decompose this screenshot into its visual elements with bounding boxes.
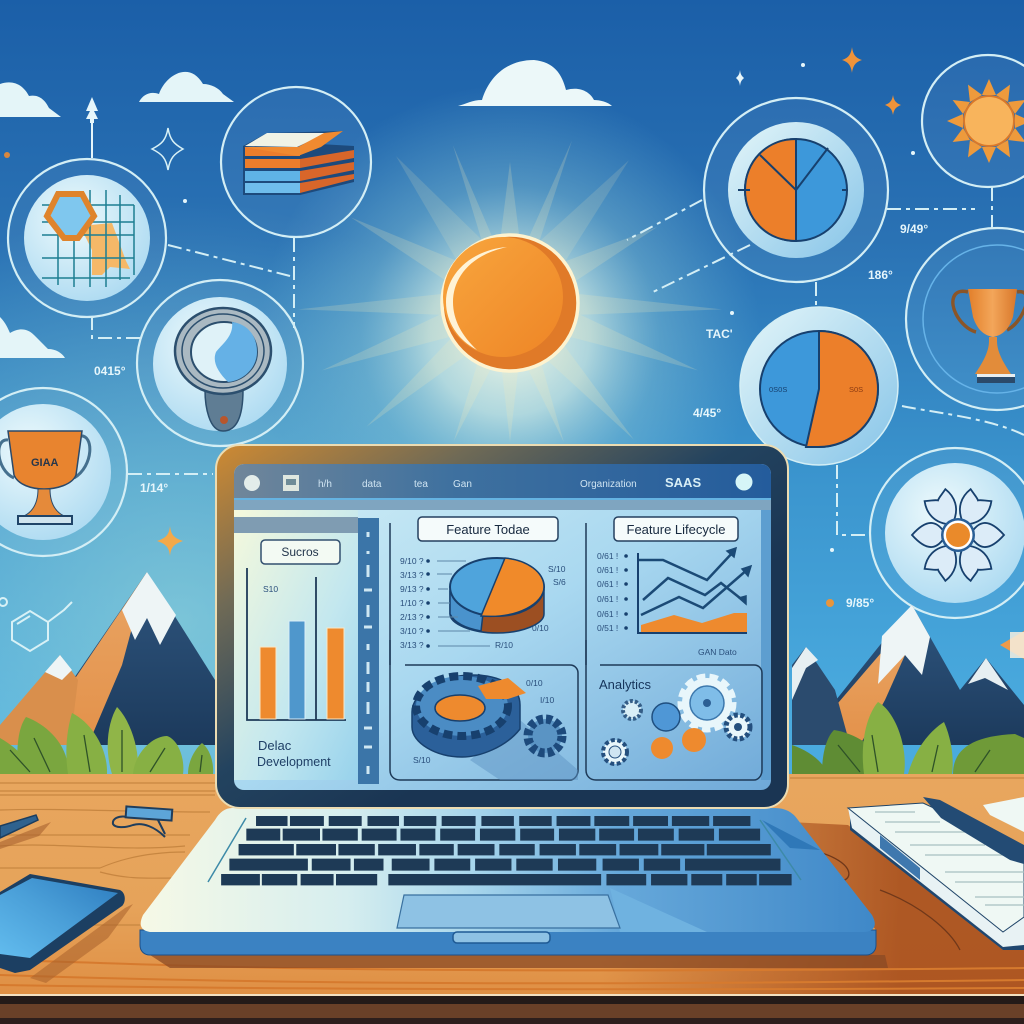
icon circle: magnifier lens [137, 280, 303, 446]
icon circle: pie chart lower: 0S0S [769, 385, 787, 394]
keyboard [221, 821, 792, 880]
header bar: Organization [580, 479, 637, 490]
lower gear panel [390, 640, 578, 780]
sun rays [298, 138, 722, 448]
header bar: tea [414, 479, 428, 490]
feature lifecycle line chart [586, 517, 751, 665]
pie chart [450, 558, 544, 633]
foliage [0, 702, 1024, 774]
laptop shadow [150, 955, 888, 968]
icon circle: pie chart top [704, 98, 888, 282]
middle feature panel: 9/10 ? [400, 556, 424, 566]
sky background [0, 0, 1024, 800]
degree labels: 9/85° [846, 596, 874, 610]
feature lifecycle line chart: 0/61 ! [597, 609, 618, 619]
lower gear panel: S/10 [413, 755, 431, 765]
icon circle: pie chart lower: S0S [849, 385, 863, 394]
left panel: Delac [258, 738, 292, 753]
clouds [0, 60, 612, 358]
middle feature panel [390, 517, 566, 665]
degree labels [94, 222, 928, 610]
screen frame [216, 445, 788, 808]
paper clip [113, 806, 172, 837]
laptop [140, 445, 876, 955]
feature lifecycle line chart: GAN Dato [698, 647, 737, 657]
sidebar [358, 518, 379, 784]
middle feature panel: 9/13 ? [400, 584, 424, 594]
degree labels: 186° [868, 268, 893, 282]
pen left [0, 815, 51, 849]
arrow up [86, 97, 98, 123]
left panel [234, 510, 358, 780]
lower gear panel: I/10 [540, 695, 554, 705]
smartphone [0, 874, 133, 983]
header bar: h/h [318, 479, 332, 490]
left panel: Sucros [281, 545, 319, 559]
middle feature panel: 3/10 ? [400, 626, 424, 636]
feature lifecycle line chart: 0/51 ! [597, 623, 618, 633]
degree labels: 1/14° [140, 481, 168, 495]
icon circle: trophy left [0, 388, 127, 556]
trackpad [397, 895, 620, 928]
lower gear panel: 0/10 [526, 678, 543, 688]
connector lines [92, 110, 1024, 535]
icon circle: pie chart lower [740, 307, 898, 465]
icon circle: flower [870, 448, 1024, 618]
icon circle: trophy right [906, 228, 1024, 410]
icon circle: report stack [221, 87, 371, 237]
degree labels: 0415° [94, 364, 126, 378]
right mountains [792, 605, 1024, 745]
left panel: S10 [263, 584, 278, 594]
middle feature panel: S/6 [553, 577, 566, 587]
feature lifecycle line chart: Feature Lifecycle [626, 522, 726, 537]
middle feature panel: 2/13 ? [400, 612, 424, 622]
latch [453, 932, 550, 943]
middle feature panel: S/10 [548, 564, 566, 574]
bar chart [260, 621, 344, 719]
sparkles [4, 47, 1024, 659]
lower analytics panel: Analytics [599, 677, 652, 692]
molecule icon [0, 598, 72, 651]
header bar: data [362, 479, 382, 490]
feature lifecycle line chart: 0/61 ! [597, 594, 618, 604]
screen [234, 464, 771, 790]
middle feature panel: 3/13 ? [400, 640, 424, 650]
degree labels: TAC' [706, 327, 733, 341]
middle feature panel: 1/10 ? [400, 598, 424, 608]
icon circle: map grid [8, 159, 166, 317]
icon circle: trophy left: GIAA [31, 457, 59, 469]
header bar: Gan [453, 479, 472, 490]
degree labels: 9/49° [900, 222, 928, 236]
lower analytics panel [586, 640, 762, 780]
wooden desk [0, 774, 1024, 1024]
middle feature panel: 3/13 ? [400, 570, 424, 580]
sun [442, 235, 578, 371]
icon circle: sun [922, 55, 1024, 187]
feature lifecycle line chart: 0/61 ! [597, 565, 618, 575]
middle feature panel: 0/10 [532, 623, 549, 633]
header bar: SAAS [665, 475, 701, 490]
left panel: Development [257, 755, 331, 769]
middle feature panel: Feature Todae [446, 522, 530, 537]
feature lifecycle line chart: 0/61 ! [597, 579, 618, 589]
notebook and pen [848, 797, 1024, 950]
degree labels: 4/45° [693, 406, 721, 420]
laptop base [140, 808, 876, 955]
left mountains [0, 572, 215, 745]
middle feature panel: R/10 [495, 640, 513, 650]
header bar [234, 464, 771, 500]
feature lifecycle line chart: 0/61 ! [597, 551, 618, 561]
